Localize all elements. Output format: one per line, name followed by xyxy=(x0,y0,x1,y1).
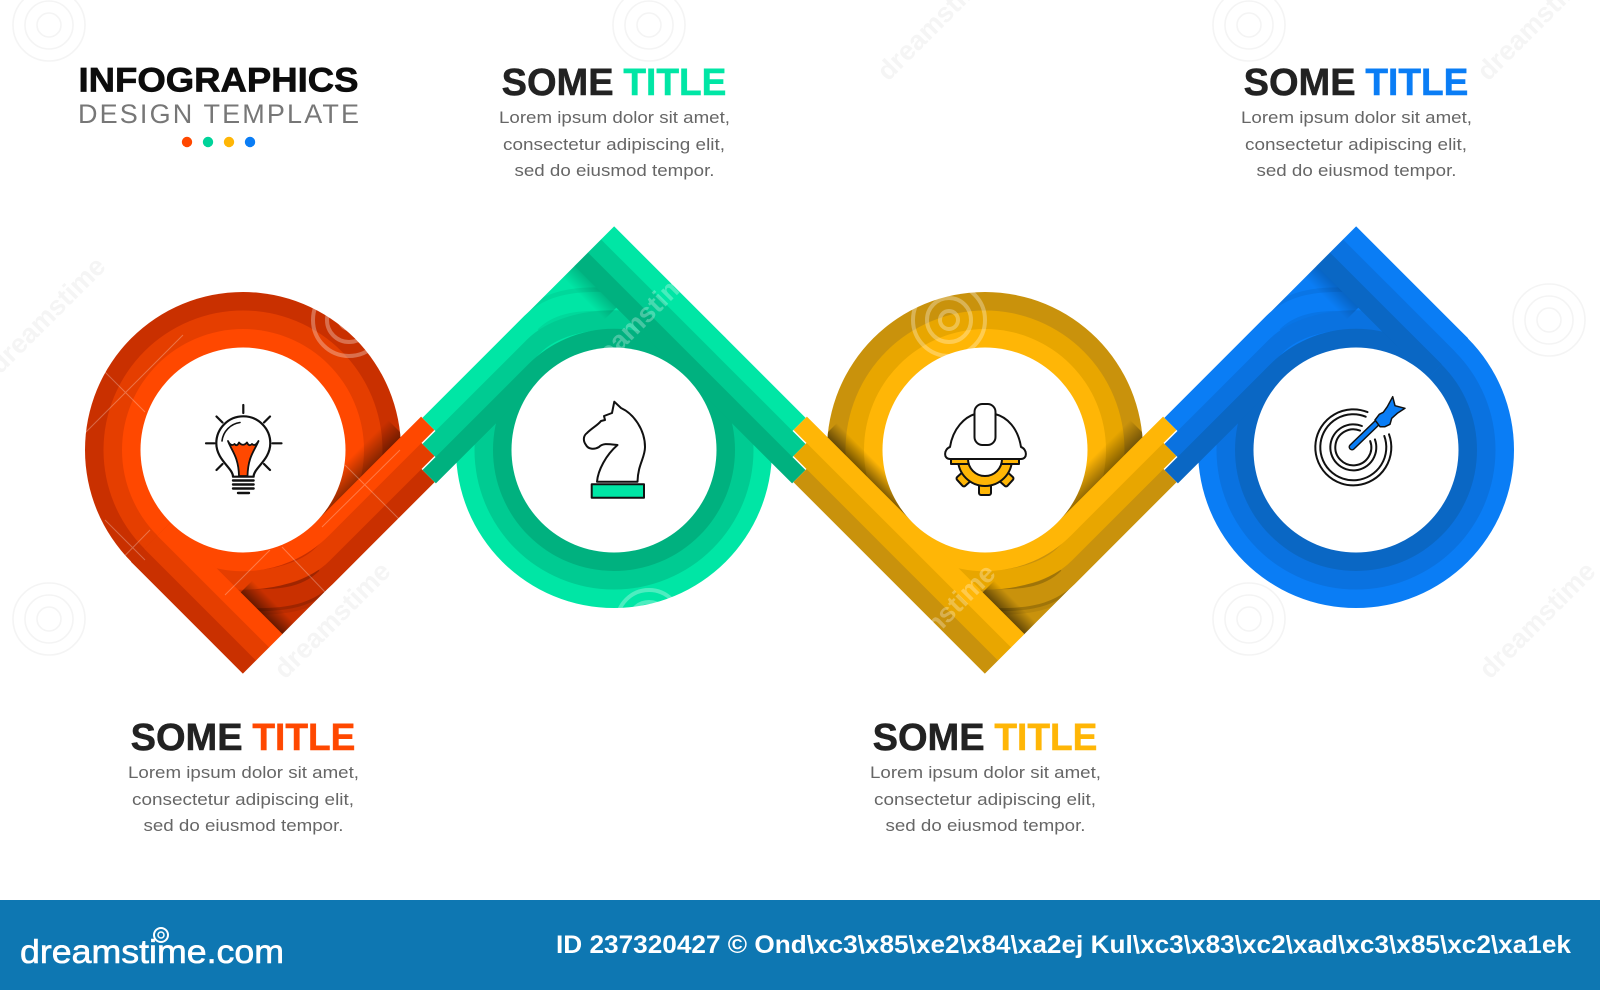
main heading xyxy=(78,62,359,129)
main heading: DESIGN TEMPLATE xyxy=(78,99,359,129)
text block: step 4: consectetur adipiscing elit, xyxy=(1245,135,1467,154)
text block: step 3: SOME xyxy=(873,717,985,759)
text block: step 2 xyxy=(499,62,730,180)
footer bar xyxy=(0,900,1600,990)
text block: step 3: TITLE xyxy=(994,717,1097,759)
text block: step 4: sed do eiusmod tempor. xyxy=(1256,161,1456,180)
text block: step 1: SOME xyxy=(131,717,243,759)
text block: step 3: Lorem ipsum dolor sit amet, xyxy=(870,763,1101,782)
text block: step 3 xyxy=(870,717,1101,835)
text block: step 3: sed do eiusmod tempor. xyxy=(886,816,1086,835)
background watermark spirals: dreamstime xyxy=(1473,556,1600,684)
footer logo: dreamstime.com xyxy=(20,933,284,970)
pin 4: blue teardrop pointing up xyxy=(1171,227,1514,608)
pin 3: yellow ring with V pointing down xyxy=(800,292,1170,673)
watermarks over the coloured shapes: dreamstime xyxy=(873,558,1001,686)
text block: step 4 xyxy=(1241,62,1472,180)
background watermark spirals xyxy=(0,0,1600,684)
watermarks over the coloured shapes xyxy=(85,258,1301,686)
text block: step 4: TITLE xyxy=(1365,62,1468,104)
text block: step 1: consectetur adipiscing elit, xyxy=(132,790,354,809)
text block: step 2: TITLE xyxy=(623,62,726,104)
icon: target with arrow xyxy=(1315,397,1405,485)
main heading: INFOGRAPHICS xyxy=(78,62,358,100)
text block: step 3: consectetur adipiscing elit, xyxy=(874,790,1096,809)
pin 1: red teardrop pointing down xyxy=(85,292,428,673)
text block: step 1: sed do eiusmod tempor. xyxy=(144,816,344,835)
text block: step 2: consectetur adipiscing elit, xyxy=(503,135,725,154)
text block: step 4: Lorem ipsum dolor sit amet, xyxy=(1241,108,1472,127)
watermarks over the coloured shapes: dreamstime xyxy=(573,258,701,386)
text block: step 2: SOME xyxy=(502,62,614,104)
background watermark spirals: dreamstime xyxy=(268,556,396,684)
text block: step 4: SOME xyxy=(1244,62,1356,104)
text block: step 1: TITLE xyxy=(252,717,355,759)
text block: step 1 xyxy=(128,717,359,835)
icon: hard hat with gear xyxy=(945,404,1026,495)
text block: step 2: sed do eiusmod tempor. xyxy=(514,161,714,180)
text block: step 1: Lorem ipsum dolor sit amet, xyxy=(128,763,359,782)
footer credit: ID 237320427 © Ond\xc3\x85\xe2\x84\xa2ej Kul\xc3\x83\xc2\xad\xc3\x85\xc2\xa1ek xyxy=(556,931,1571,959)
icon: chess knight xyxy=(584,402,645,498)
watermarks over the coloured shapes: dreamstime xyxy=(1173,258,1301,386)
pin 2: green diamond-top ring pointing up xyxy=(429,227,799,608)
legend dots xyxy=(182,137,255,147)
text block: step 2: Lorem ipsum dolor sit amet, xyxy=(499,108,730,127)
icon: light bulb xyxy=(206,405,282,493)
